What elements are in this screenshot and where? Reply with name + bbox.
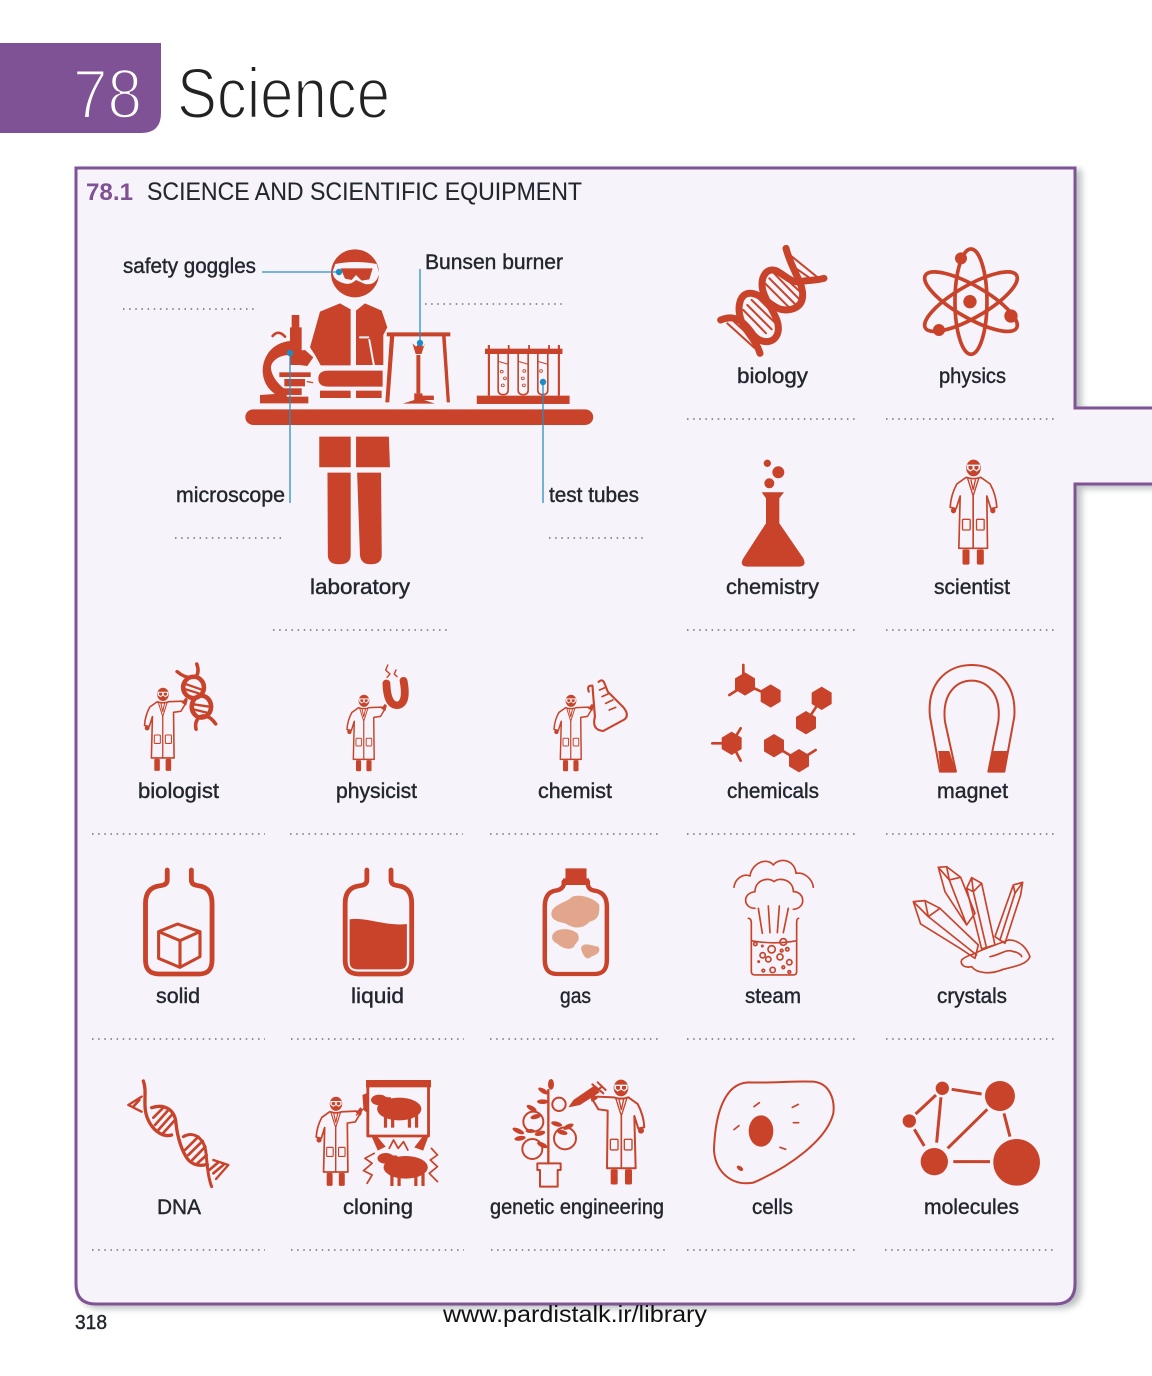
item: cloning [291, 1080, 464, 1250]
section heading: SCIENCE AND SCIENTIFIC EQUIPMENT [147, 178, 582, 206]
item: physicist [290, 665, 463, 834]
icon: scientist [950, 460, 997, 565]
icon: horseshoe magnet [930, 665, 1014, 772]
answer line [92, 1038, 265, 1040]
icon: atom [917, 249, 1025, 354]
item: molecules [885, 1081, 1057, 1250]
answer line [490, 833, 662, 835]
answer line [490, 1038, 662, 1040]
label: liquid: liquid [351, 985, 404, 1008]
callout line: safety goggles [262, 269, 342, 275]
answer line [687, 1038, 859, 1040]
icon: cell [714, 1081, 834, 1183]
label: cells: cells [752, 1196, 793, 1219]
callout line: test tubes [540, 379, 546, 503]
answer line [886, 1038, 1058, 1040]
icon: scientist at lab bench [245, 249, 593, 564]
item: chemicals [687, 665, 859, 834]
icon: DNA ribbon [721, 248, 824, 353]
page number: 318 [75, 1312, 107, 1334]
icon: physicist with magnet [347, 665, 405, 771]
icon: chemical hexagons [712, 665, 832, 772]
label: Bunsen burner: Bunsen burner [425, 251, 563, 274]
answer line [291, 1038, 464, 1040]
label: microscope: microscope [176, 484, 285, 507]
answer line [687, 833, 859, 835]
label: gas: gas [560, 985, 591, 1008]
label: physicist: physicist [336, 780, 417, 803]
answer line [92, 1249, 265, 1251]
section heading: 78.1 [86, 179, 133, 206]
answer line [290, 833, 463, 835]
label: cloning: cloning [343, 1196, 413, 1219]
item: crystals [886, 867, 1058, 1039]
label: chemistry: chemistry [726, 576, 820, 599]
label: solid: solid [156, 985, 200, 1008]
answer line [687, 629, 859, 631]
icon: bottle with liquid [345, 870, 412, 974]
icon: crystal cluster [913, 867, 1030, 973]
label: test tubes: test tubes [549, 484, 639, 507]
item: magnet [886, 665, 1058, 834]
chapter number: 78 [73, 55, 142, 133]
icon: molecule network [903, 1081, 1040, 1186]
item: chemistry [687, 460, 859, 630]
item: chemist [490, 680, 662, 834]
icon: scientist cloning a sheep [316, 1080, 437, 1186]
label: physics: physics [939, 365, 1006, 388]
item: liquid [291, 870, 464, 1039]
icon: bottle with gas [545, 868, 607, 974]
icon: scientist injecting a plant [512, 1079, 644, 1187]
answer line [886, 833, 1058, 835]
answer line [687, 418, 859, 420]
icon: biologist with DNA [145, 664, 216, 771]
label: crystals: crystals [937, 985, 1007, 1008]
item: biology [687, 248, 859, 419]
label: test tubes [549, 484, 645, 538]
label: biology: biology [737, 365, 809, 388]
laboratory illustration [123, 249, 645, 630]
panel: science and scientific equipment [76, 168, 1152, 1304]
label: safety goggles: safety goggles [123, 255, 256, 278]
answer line [291, 1249, 464, 1251]
chapter title: Science [177, 55, 390, 134]
icon: flask [742, 460, 805, 567]
chapter number tab [0, 43, 161, 133]
icon: bottle with cube [146, 870, 212, 974]
item: solid [92, 870, 265, 1039]
label: steam: steam [745, 985, 801, 1008]
label: molecules: molecules [924, 1196, 1019, 1219]
label: Bunsen burner [425, 251, 565, 304]
icon: DNA helix [128, 1081, 228, 1187]
answer line [687, 1249, 859, 1251]
label: safety goggles [123, 255, 256, 309]
callout line: Bunsen burner [417, 269, 423, 346]
icon: beaker with steam [734, 860, 813, 975]
item: cells [687, 1081, 859, 1250]
label: chemist: chemist [538, 780, 612, 803]
label: microscope [175, 484, 285, 538]
item: gas [490, 868, 662, 1039]
label: biologist: biologist [138, 780, 219, 803]
website watermark: www.pardistalk.ir/library [442, 1301, 707, 1327]
icon: chemist with flask [554, 680, 627, 771]
label: chemicals: chemicals [727, 780, 819, 803]
answer line [886, 418, 1058, 420]
item: genetic engineering [490, 1079, 665, 1250]
label: magnet: magnet [937, 780, 1008, 803]
label: laboratory: laboratory [310, 576, 411, 599]
label: genetic engineering: genetic engineering [490, 1196, 664, 1219]
answer line [92, 833, 265, 835]
label: DNA: DNA [157, 1196, 201, 1219]
item: DNA [92, 1081, 265, 1250]
answer line [886, 629, 1058, 631]
label: scientist: scientist [934, 576, 1010, 599]
item: physics [886, 249, 1058, 419]
item: steam [687, 860, 859, 1039]
item: scientist [886, 460, 1058, 630]
item: biologist [92, 664, 265, 834]
callout line: microscope [287, 350, 293, 503]
answer line [491, 1249, 665, 1251]
answer line [885, 1249, 1057, 1251]
